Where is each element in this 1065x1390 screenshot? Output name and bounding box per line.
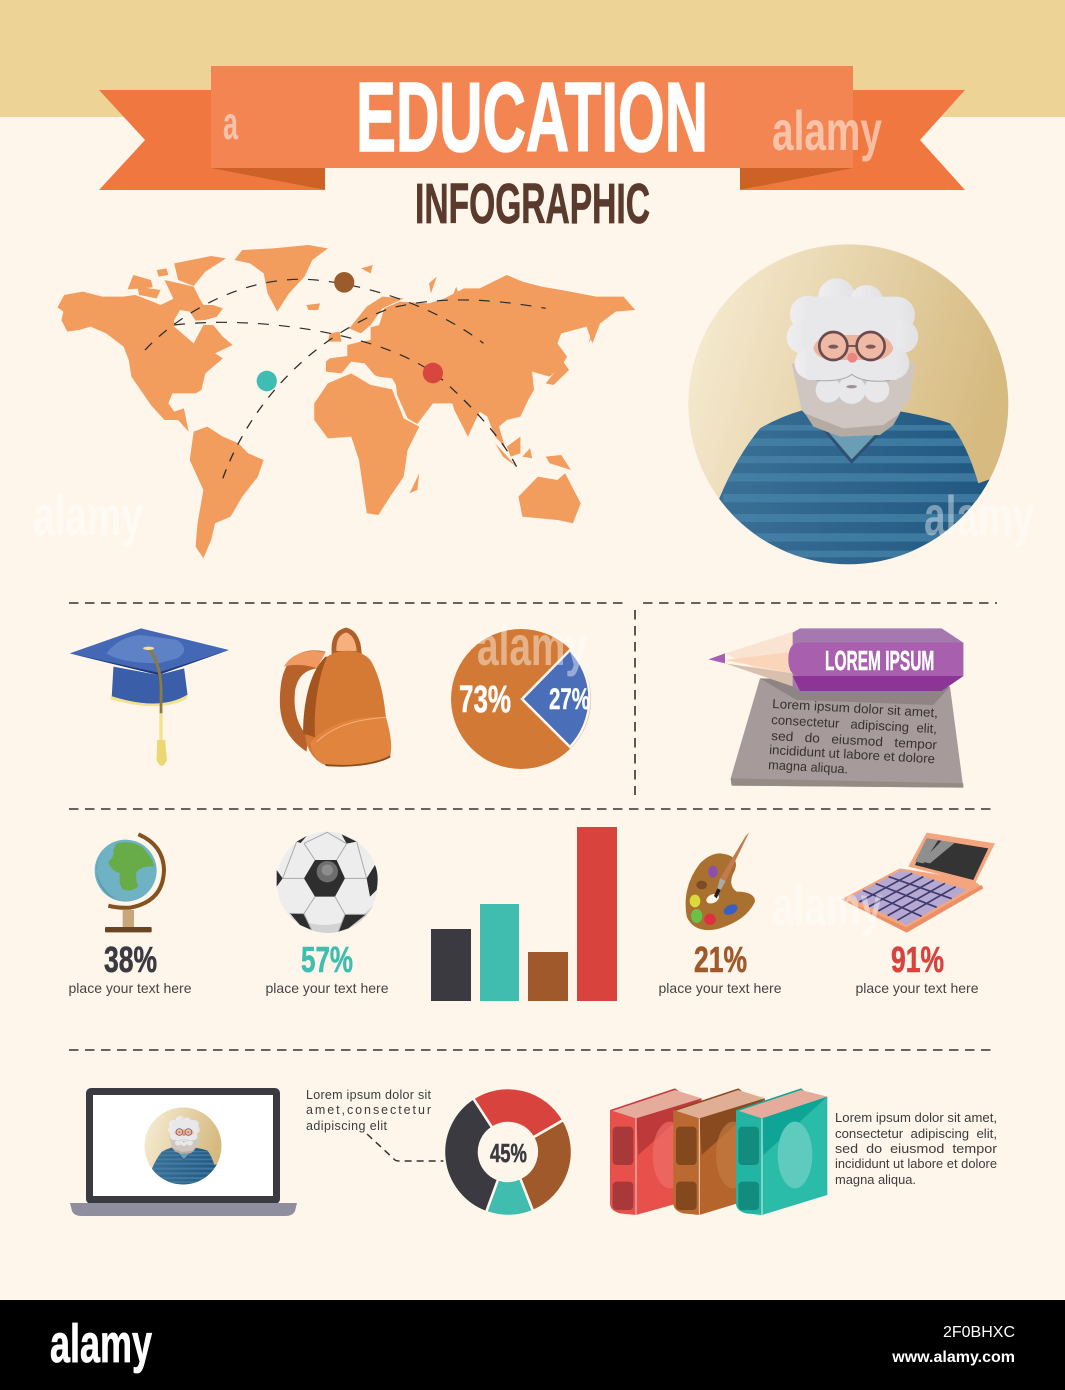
icon: calculator [842,833,995,933]
watermarks: alamy [33,484,143,547]
title text: EDUCATION [356,62,708,172]
note text: sed do eiusmod tempor [771,728,938,752]
icon: books [610,1088,827,1215]
icon: backpack [280,630,391,767]
pie chart: 73% / 27% [451,629,591,769]
stat: 91%: 91% [891,939,944,980]
stat: 21% [659,939,782,996]
footer logo: alamy [50,1314,152,1374]
side text: books caption: magna aliqua. [835,1173,916,1187]
brown book [673,1088,765,1215]
side text: donut caption: adipiscing elit [306,1119,388,1133]
top band [0,0,1065,117]
label: 45%: 45% [490,1138,527,1168]
bar chart [431,827,617,1001]
stat: 38%: place your text here [69,980,192,996]
note text: incididunt ut labore et dolore [769,742,935,766]
stat: 57%: 57% [301,939,353,980]
side text: books caption: incididunt ut labore et dolore [835,1157,997,1171]
side text: books caption [835,1111,997,1187]
teal book [736,1088,827,1215]
side text: books caption: consectetur adipiscing elit, [835,1127,997,1141]
side text: donut caption [306,1088,432,1133]
pencil tip [708,632,793,687]
note text: consectetur adipiscing elit, [771,712,937,736]
connector line [367,1134,445,1161]
mini portrait [145,1108,223,1187]
icon: globe [95,834,164,932]
watermarks: alamy [772,99,882,162]
icon: paint palette [686,833,755,930]
note text: magna aliqua. [768,757,849,776]
icon: graduation cap [70,628,229,766]
note text [768,696,938,776]
world map [58,245,635,558]
map marker: teal [257,371,277,391]
label: 73%: 73% [459,679,511,721]
watermarks: a [223,97,238,149]
icon: laptop with portrait [70,1088,297,1216]
stat: 38% [69,939,192,996]
stat: 57%: place your text here [266,980,389,996]
stat: 21%: 21% [694,939,747,980]
stat: 21%: place your text here [659,980,782,996]
divider lines [69,603,997,1050]
stat: 91% [856,939,979,996]
watermarks: alamy [772,874,882,937]
title ribbon [99,62,965,190]
red book [610,1088,702,1215]
portrait of professor [688,244,1013,573]
donut chart: 45% [444,1088,572,1216]
side text: books caption: sed do eiusmod tempor [835,1142,997,1156]
side text: donut caption: amet,consectetur [306,1103,431,1117]
map marker: red [423,363,443,383]
side text: donut caption: Lorem ipsum dolor sit [306,1088,432,1102]
pencil label [788,628,963,691]
pencil label: LOREM IPSUM [825,645,934,676]
label: 27%: 27% [549,683,590,716]
footer bar [0,1300,1065,1390]
watermarks [33,97,1034,937]
side text: books caption: Lorem ipsum dolor sit amet, [835,1111,997,1125]
footer url: www.alamy.com [891,1349,1015,1366]
icon: soccer ball [277,832,378,933]
note text: Lorem ipsum dolor sit amet, [772,696,938,720]
watermarks: alamy [477,614,587,677]
pencil note panel [708,628,963,788]
stat: 38%: 38% [104,939,157,980]
map marker: brown [334,272,354,293]
subtitle: INFOGRAPHIC [415,172,650,236]
stat: 91%: place your text here [856,980,979,996]
stat: 57% [266,939,389,996]
footer image id: 2F0BHXC [943,1324,1015,1341]
